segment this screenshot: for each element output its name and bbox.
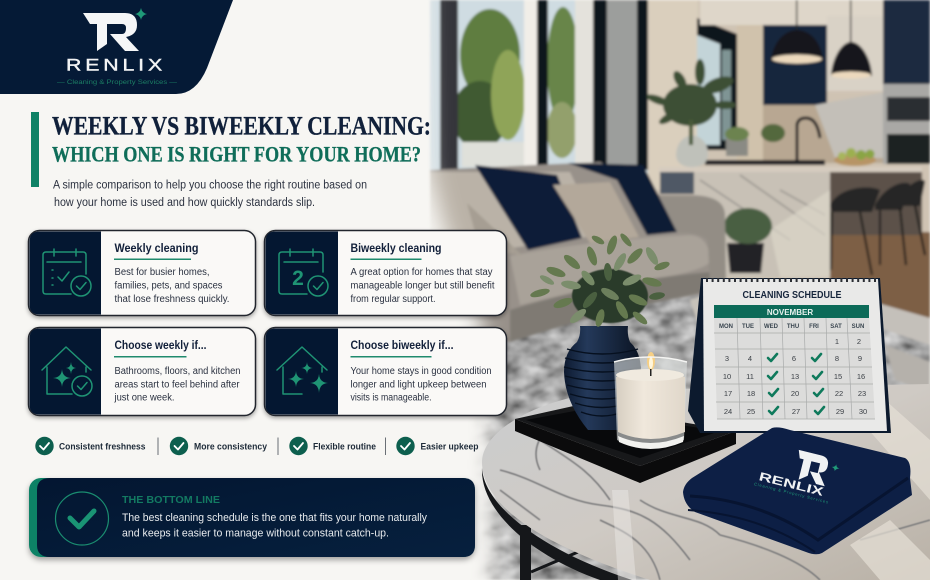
icon: calendar with number two: 2 bbox=[292, 267, 304, 290]
logo mark bbox=[83, 13, 139, 51]
description: visits is manageable. bbox=[350, 392, 432, 404]
description: just one week. bbox=[114, 392, 174, 404]
wall and second window bbox=[648, 0, 890, 190]
sofa cushions bbox=[467, 163, 677, 255]
calendar day labels: SUN bbox=[852, 324, 864, 330]
towel logo: RENLIX bbox=[758, 469, 825, 499]
description: Best for busier homes, bbox=[114, 267, 210, 278]
subtitle bbox=[53, 180, 367, 209]
windows bbox=[430, 0, 650, 175]
calendar dates: 20 bbox=[791, 389, 799, 398]
benefit: consistent freshness: Consistent freshness bbox=[59, 442, 146, 452]
calendar dates: 27 bbox=[792, 407, 800, 416]
benefit: flexible routine bbox=[289, 437, 376, 455]
heading: Weekly cleaning bbox=[114, 241, 198, 255]
calendar day labels bbox=[719, 324, 864, 330]
benefit: consistent freshness bbox=[35, 437, 145, 455]
description: Bathrooms, floors, and kitchen bbox=[114, 366, 240, 377]
calendar dates: 1 bbox=[835, 337, 839, 346]
callout body bbox=[122, 512, 427, 540]
calendar title: CLEANING SCHEDULE bbox=[742, 289, 842, 301]
plant bbox=[529, 232, 671, 328]
callout: the bottom line bbox=[29, 478, 475, 557]
towel logo bbox=[754, 441, 841, 505]
calendar dates: 2 bbox=[857, 337, 861, 346]
calendar dates: 3 bbox=[725, 354, 729, 363]
benefit: more consistency bbox=[170, 437, 267, 455]
calendar month banner: NOVEMBER bbox=[767, 308, 813, 317]
towel logo: Cleaning & Property Services bbox=[754, 481, 829, 504]
description: A great option for homes that stay bbox=[350, 267, 492, 278]
panel: biweekly cleaning bbox=[264, 230, 506, 316]
panel: choose weekly bbox=[28, 328, 256, 416]
kitchen plant bbox=[645, 59, 785, 167]
calendar dates: 6 bbox=[792, 354, 796, 363]
calendar day labels: MON bbox=[719, 324, 733, 330]
background potted plant bbox=[724, 208, 772, 273]
calendar dates bbox=[723, 337, 867, 416]
icon: calendar with number two bbox=[279, 249, 328, 296]
heading: Choose biweekly if... bbox=[350, 338, 454, 352]
icon: house with sparkles bbox=[277, 347, 328, 394]
calendar dates: 8 bbox=[835, 354, 839, 363]
calendar back stand bbox=[688, 278, 891, 433]
icon: house with sparkle bbox=[42, 347, 92, 396]
folded towel bbox=[683, 427, 912, 554]
island bbox=[659, 118, 930, 280]
description: manageable longer but still benefit bbox=[350, 280, 495, 292]
candle bbox=[614, 352, 687, 449]
calendar dates: 18 bbox=[747, 389, 755, 398]
calendar dates: 30 bbox=[859, 407, 867, 416]
title: WHICH ONE IS RIGHT FOR YOUR HOME? bbox=[52, 142, 421, 166]
calendar dates: 4 bbox=[748, 354, 752, 363]
benefit: easier upkeep: Easier upkeep bbox=[420, 442, 479, 452]
floor and rug bbox=[430, 232, 930, 580]
description bbox=[114, 267, 230, 305]
description: families, pets, and spaces bbox=[114, 280, 222, 292]
calendar day labels: THU bbox=[787, 324, 799, 330]
calendar dates: 9 bbox=[858, 354, 862, 363]
calendar dates: 25 bbox=[747, 407, 755, 416]
benefit: more consistency: More consistency bbox=[194, 442, 267, 452]
calendar dates: 11 bbox=[746, 372, 754, 381]
calendar dates: 15 bbox=[834, 372, 842, 381]
description: that lose freshness quickly. bbox=[114, 294, 230, 305]
benefit: easier upkeep bbox=[396, 437, 479, 455]
panel: choose biweekly bbox=[264, 328, 506, 416]
logo wordmark: RENLIX bbox=[66, 56, 166, 74]
benefit: flexible routine: Flexible routine bbox=[313, 442, 376, 452]
heading: Biweekly cleaning bbox=[350, 241, 442, 255]
heading: Choose weekly if... bbox=[114, 338, 206, 352]
kitchen cabinets bbox=[763, 0, 930, 164]
description: Your home stays in good condition bbox=[350, 366, 492, 377]
callout body: The best cleaning schedule is the one that fits your home naturally bbox=[122, 512, 427, 524]
description bbox=[350, 366, 492, 404]
subtitle: how your home is used and how quickly standards slip. bbox=[54, 197, 315, 209]
description bbox=[350, 267, 495, 305]
calendar dates: 24 bbox=[724, 407, 732, 416]
icon: check circle bbox=[56, 492, 108, 545]
photo: living room and kitchen bbox=[430, 0, 930, 580]
description bbox=[114, 366, 240, 404]
logo star bbox=[135, 8, 147, 20]
icon: calendar with check bbox=[43, 249, 91, 296]
logo panel bbox=[0, 0, 233, 94]
calendar check marks bbox=[768, 354, 824, 414]
calendar dates: 22 bbox=[835, 389, 843, 398]
calendar dates: 16 bbox=[857, 372, 865, 381]
calendar day labels: WED bbox=[764, 324, 779, 330]
calendar grid bbox=[714, 318, 875, 419]
logo tagline: — Cleaning & Property Services — bbox=[57, 79, 177, 86]
calendar bbox=[688, 278, 891, 433]
calendar day labels: SAT bbox=[830, 324, 842, 330]
calendar dates: 17 bbox=[724, 389, 732, 398]
description: areas start to feel behind after bbox=[114, 380, 240, 390]
calendar dates: 13 bbox=[791, 372, 799, 381]
calendar day labels: FRI bbox=[809, 324, 819, 330]
vase bbox=[564, 326, 641, 430]
description: from regular support. bbox=[350, 294, 436, 305]
coffee table bbox=[482, 384, 930, 580]
calendar spiral bbox=[706, 278, 876, 282]
calendar dates: 10 bbox=[723, 372, 731, 381]
calendar day labels: TUE bbox=[742, 324, 754, 330]
sofa bbox=[430, 162, 726, 342]
panel: weekly cleaning bbox=[28, 230, 256, 316]
benefits row bbox=[35, 437, 479, 455]
calendar month banner bbox=[714, 305, 869, 318]
calendar dates: 23 bbox=[858, 389, 866, 398]
title: WEEKLY VS BIWEEKLY CLEANING: bbox=[52, 112, 431, 140]
callout heading: THE BOTTOM LINE bbox=[122, 494, 220, 506]
title bbox=[52, 112, 431, 166]
title accent bar bbox=[31, 112, 39, 187]
calendar dates: 29 bbox=[836, 407, 844, 416]
tray bbox=[515, 405, 736, 483]
callout body: and keeps it easier to manage without constant catch-up. bbox=[122, 528, 389, 540]
subtitle: A simple comparison to help you choose the right routine based on bbox=[53, 180, 367, 192]
pendant lamps bbox=[771, 0, 872, 78]
calendar page bbox=[703, 279, 887, 431]
description: longer and light upkeep between bbox=[350, 380, 486, 390]
